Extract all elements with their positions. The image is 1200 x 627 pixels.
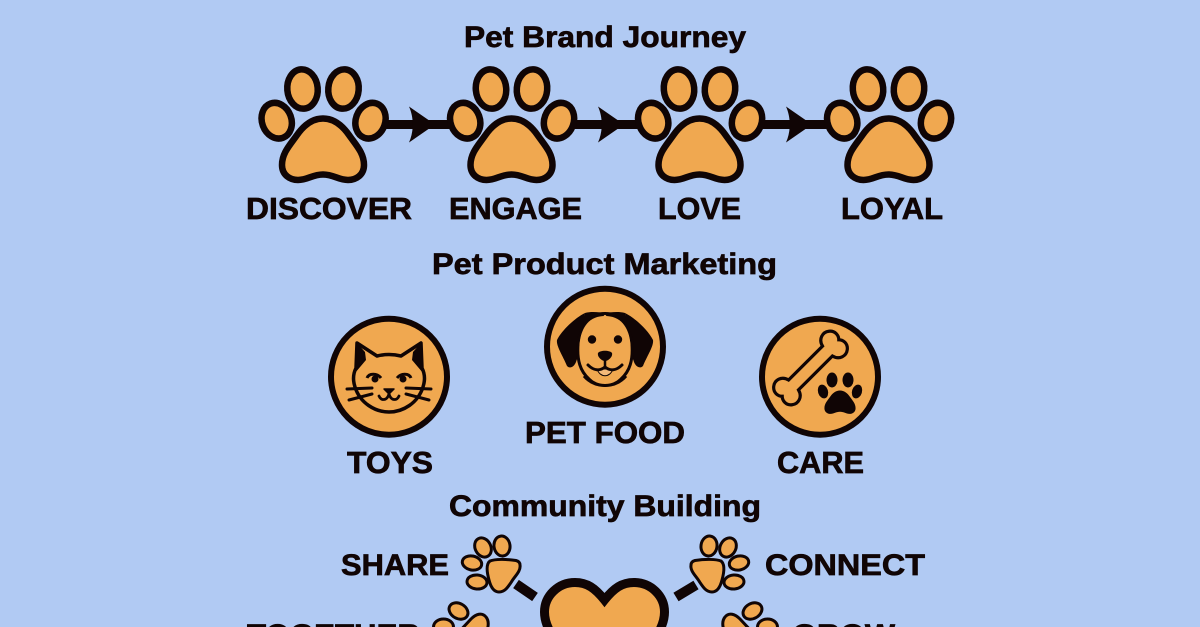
icon: cat badge [331, 319, 447, 435]
label: TOYS: TOYS [347, 445, 433, 480]
label: SHARE: SHARE [341, 549, 449, 582]
icon: heart clipped by frame [540, 578, 669, 627]
icon: paw share [461, 535, 520, 592]
label: PET FOOD: PET FOOD [525, 415, 685, 450]
label: CARE: CARE [777, 445, 864, 480]
title: Community Building: Community Building [449, 490, 761, 523]
icon: paw connect [691, 535, 750, 592]
title: Pet Product Marketing: Pet Product Marketing [432, 248, 777, 281]
icon: paw together clipped by frame [432, 601, 490, 627]
label: LOYAL: LOYAL [841, 191, 943, 226]
label: DISCOVER: DISCOVER [246, 191, 412, 226]
arrow: discover to engage [385, 106, 451, 142]
icon: bone and paw badge [762, 319, 878, 435]
icon: paw engage [445, 68, 579, 180]
label: ENGAGE: ENGAGE [449, 191, 582, 226]
label: LOVE: LOVE [658, 191, 741, 226]
connector: share to heart [516, 584, 535, 597]
title: Pet Brand Journey: Pet Brand Journey [464, 21, 746, 54]
label: CONNECT: CONNECT [765, 549, 925, 582]
icon: paw discover [257, 68, 391, 180]
icon: dog badge [547, 289, 663, 405]
arrow: love to loyal [762, 106, 828, 142]
icon: paw loyal [822, 68, 956, 180]
arrow: engage to love [574, 106, 640, 142]
connector: connect to heart [676, 585, 696, 597]
icon: paw love [633, 68, 767, 180]
icon: paw grow clipped by frame [721, 601, 779, 627]
